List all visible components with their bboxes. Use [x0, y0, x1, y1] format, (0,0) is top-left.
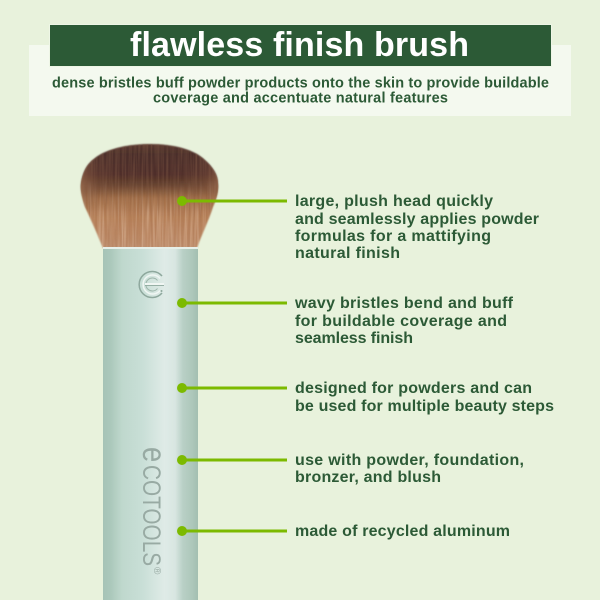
brush — [78, 142, 223, 600]
subtitle panel — [29, 45, 571, 116]
text 5: made of recycled aluminum — [295, 523, 510, 540]
pointer 5 — [177, 526, 287, 536]
text 3: be used for multiple beauty steps — [295, 398, 554, 415]
title banner — [50, 24, 552, 66]
callout 5 — [177, 523, 510, 540]
pointer 3 — [177, 383, 287, 393]
subtitle text: coverage and accentuate natural features — [153, 90, 448, 106]
text 4 — [295, 452, 524, 486]
text 3: designed for powders and can — [295, 380, 532, 397]
brush handle — [103, 248, 198, 600]
text 2: for buildable coverage and — [295, 313, 507, 330]
subtitle text: dense bristles buff powder products onto the skin to provide buildable — [52, 76, 549, 92]
callout 1 — [177, 193, 539, 262]
pointer 1 — [177, 196, 287, 206]
handle wordmark: COTOOLS — [138, 465, 166, 566]
handle wordmark: e — [135, 447, 171, 462]
handle wordmark — [135, 447, 171, 575]
handle collar highlight — [103, 247, 198, 249]
embossed e logo — [139, 272, 164, 298]
text 1: large, plush head quickly — [295, 193, 493, 210]
callout 3 — [177, 380, 554, 415]
text 2: seamless finish — [295, 330, 413, 347]
pointer 2 — [177, 298, 287, 308]
text 1 — [295, 193, 539, 262]
text 1: formulas for a mattifying — [295, 228, 491, 245]
title banner: flawless finish brush — [130, 26, 469, 64]
text 4: use with powder, foundation, — [295, 452, 524, 469]
handle wordmark: ® — [151, 567, 162, 575]
callout 4 — [177, 452, 524, 486]
text 1: natural finish — [295, 245, 400, 262]
text 3 — [295, 380, 554, 415]
subtitle text — [52, 76, 549, 106]
brush head bristles — [78, 142, 223, 250]
text 1: and seamlessly applies powder — [295, 211, 539, 228]
text 2: wavy bristles bend and buff — [294, 295, 514, 312]
text 2 — [294, 295, 514, 347]
callout 2 — [177, 295, 514, 347]
pointer 4 — [177, 455, 287, 465]
text 4: bronzer, and blush — [295, 469, 441, 486]
